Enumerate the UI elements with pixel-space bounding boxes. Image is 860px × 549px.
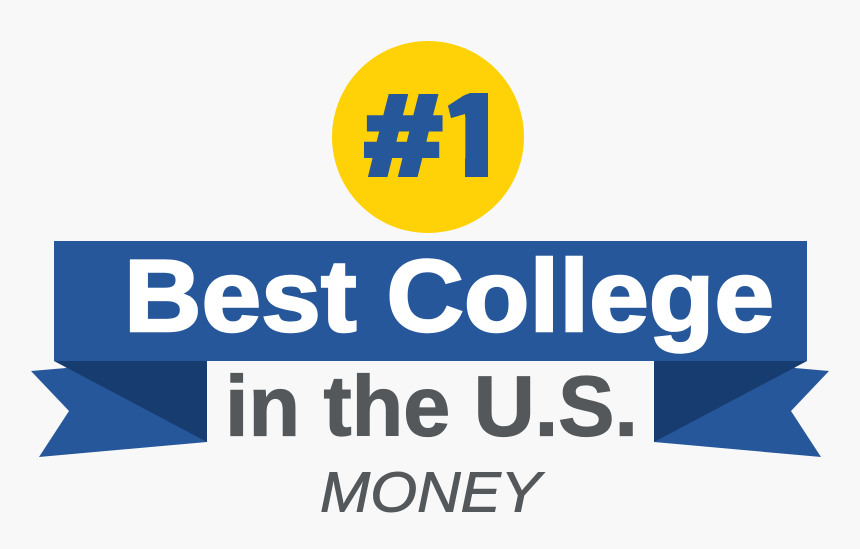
yellow circle with #1: [332, 41, 524, 233]
right ribbon tail: [654, 361, 829, 457]
lower banner panel: [207, 361, 654, 442]
subheading: in the U.S.: in the U.S.: [225, 360, 638, 454]
number one rank text: #: [366, 73, 440, 199]
number one rank text: [364, 93, 488, 177]
badge: best college ranking: [31, 41, 829, 512]
heading: Best College: Best College: [124, 239, 774, 353]
source: MONEY: MONEY: [320, 460, 545, 524]
number one rank text: 1: [443, 72, 506, 198]
left ribbon tail: [31, 361, 207, 457]
main blue banner: [54, 241, 807, 361]
